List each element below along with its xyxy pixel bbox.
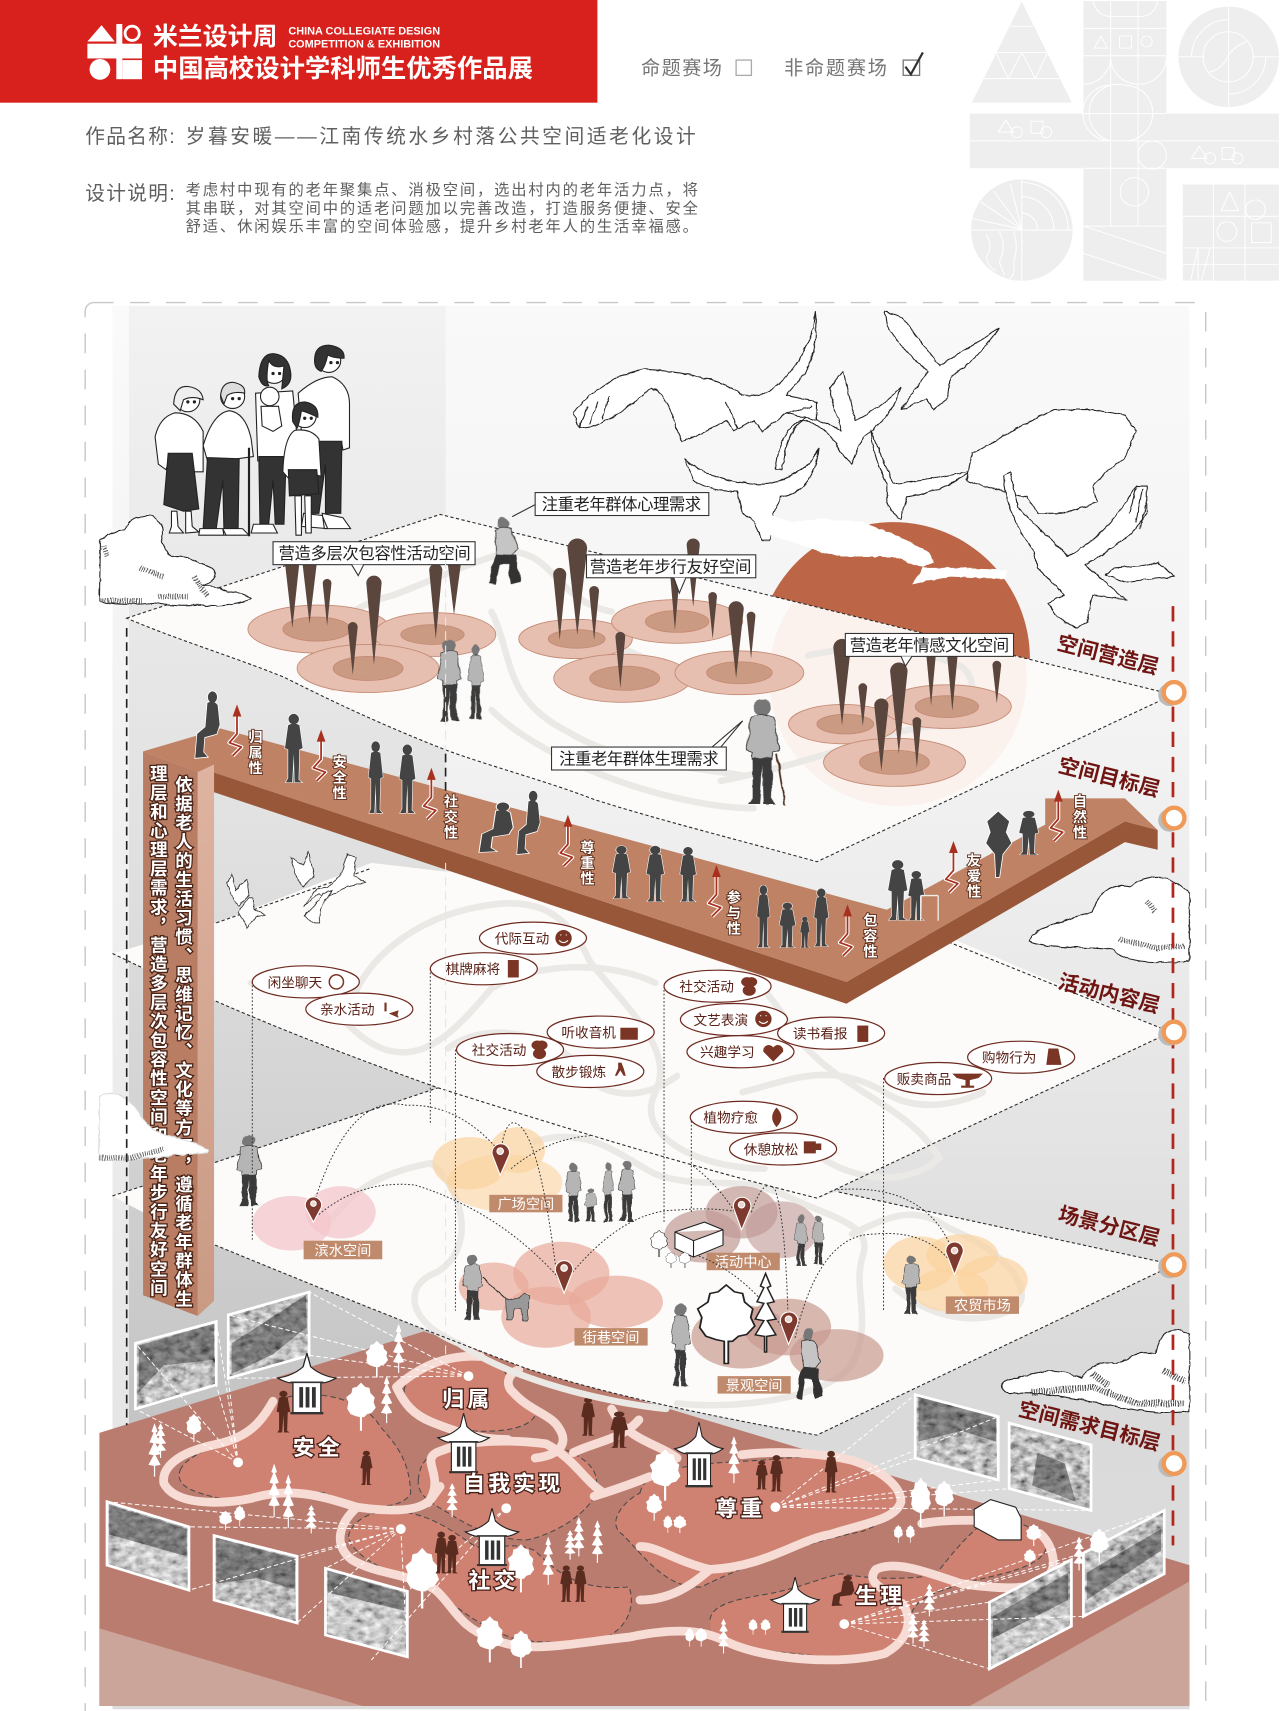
bubble: selling [885,1062,992,1095]
site: plaza: 广场空间 [497,1197,554,1213]
bubble: mahjong [430,953,537,985]
bubble: social 1: 社交活动 [472,1042,526,1058]
activity plane [112,863,1171,1198]
layer titles: 场景分区层 [1056,1203,1162,1250]
banner english: CHINA COLLEGIATE DESIGN [288,25,440,37]
cloud lower left [99,1093,208,1161]
column text right: 依据老人的生活习惯、思维记忆、文化等方面，遵循老年群体生 [173,775,193,1309]
bird 6 [1004,472,1147,628]
scene plane roads [328,1137,1022,1409]
bubble: waterside: 亲水活动 [320,1003,375,1018]
ground zone labels: 归属 [442,1387,493,1412]
baby [260,387,282,431]
header banner [0,0,597,103]
ground paths [164,1356,1053,1660]
competition type: 命题赛场 [641,57,722,79]
bubble: reading: 读书看报 [793,1027,848,1042]
ground base [99,1331,1189,1706]
logo [87,24,142,80]
arrow attribute labels: 参与性 [725,890,741,937]
layer titles: 空间需求目标层 [1016,1397,1163,1455]
banner title: 米兰设计周 [153,23,277,51]
cloud left [99,516,251,606]
vertical dashed lines [127,546,446,1425]
dotted connection arcs [315,1104,955,1338]
activity disc clusters [248,600,1011,786]
layer: space creation [127,493,1173,862]
site: market [884,1234,1028,1315]
bubble: performance [680,1003,787,1036]
bird 1 [573,311,817,442]
site: activity center [664,1186,818,1271]
bubble: walking [537,1055,644,1087]
work title: 岁暮安暖——江南传统水乡村落公共空间适老化设计 [186,126,696,148]
bird 3 [775,371,901,470]
arrow attribute labels: 友爱性 [965,852,981,900]
bubble: social 1 [457,1034,564,1066]
arrow side [213,772,1158,1004]
bird 5 [870,430,971,519]
arrow attribute labels: 自然性 [1071,793,1087,841]
silhouettes on arrow [195,691,1038,948]
arrow attribute labels: 包容性 [861,913,877,960]
arrow attribute labels: 安全性 [331,754,347,801]
callout: inclusive space [273,542,475,576]
arrow attribute labels: 归属性 [246,729,263,776]
target arrow band [143,691,1158,1316]
bubble: social 2 [664,970,771,1002]
right timeline [1016,606,1184,1545]
trees on ground [148,1324,1109,1668]
people on creation plane [438,517,785,806]
design description [186,182,698,236]
dashed frame [85,303,1206,1711]
site: plaza [432,1127,562,1213]
pagodas and buildings [278,1353,1021,1633]
creation plane [127,514,1173,862]
layer titles [1016,631,1163,1455]
callout: emotional culture [845,633,1014,666]
bubble: radio [547,1016,654,1048]
spikes [285,538,1001,771]
design description label: 设计说明: [85,183,175,205]
work title label: 作品名称: [85,126,175,148]
ground zone labels: 安全 [293,1435,343,1460]
family illustration [155,345,351,536]
dotted drop lines [252,969,884,1311]
ground front wall [99,1581,1189,1706]
ground zone labels: 尊重 [715,1496,766,1521]
bird 4 [685,448,819,541]
bubble: walking: 散步锻炼 [552,1065,606,1080]
column text left: 理层和心理层需求，营造多层次包容性空间和老年步行友好空间 [148,765,168,1298]
ground layer: demand map [99,1292,1189,1706]
location pins [305,1144,963,1344]
grandpa [199,382,253,536]
mom [251,354,297,533]
site: activity center: 活动中心 [715,1255,772,1271]
cloud over sun [767,513,1008,584]
banner english [288,25,440,51]
cloud mid right [1029,877,1189,962]
scene trees [650,1230,776,1364]
design description: 考虑村中现有的老年聚集点、消极空间，选出村内的老年活力点，将 [186,182,698,199]
decorative geometric logo pattern [970,1,1279,281]
cloud upper right [967,410,1136,513]
bubble: chatting [252,966,359,998]
bird 2 [885,311,999,410]
site: landscape [691,1299,884,1394]
ground zone labels [293,1387,905,1608]
scene plane [112,1088,1174,1435]
connection lines [107,1292,1164,1669]
people on ground [277,1391,854,1606]
bird 1 feathers [579,395,813,428]
bubble: chatting: 闲坐聊天 [268,975,323,990]
callout: inclusive space: 营造多层次包容性活动空间 [278,545,471,563]
background panel [112,306,1189,1709]
callout: physiological [552,721,743,770]
sun reflection [770,602,1026,806]
callout: physiological: 注重老年群体生理需求 [559,751,719,769]
ground zone labels: 社交 [469,1568,519,1593]
creation plane roads [317,552,972,808]
site: waterfront [252,1186,382,1259]
callout: psychological [512,493,709,517]
bubble: selling: 贩卖商品 [897,1072,951,1087]
bubble: intergenerational: 代际互动 [495,932,549,947]
bubble: social 2: 社交活动 [679,979,734,995]
creation plane outline [127,514,1173,862]
layer: activity content [112,863,1171,1198]
arrow top [143,728,1158,982]
activity plane outline [112,868,1171,1198]
bubble: waterside [306,993,413,1025]
rising arrows [229,704,1063,956]
activity plane roads [251,903,983,1177]
hub dots [233,1371,849,1629]
design description: 舒适、休闲娱乐丰富的空间体验感，提升乡村老年人的生活幸福感。 [186,218,698,236]
arrow attribute labels: 尊重性 [578,839,595,886]
bubble: learning: 兴趣学习 [700,1045,755,1060]
zone blobs [179,1360,1046,1658]
bubble: reading [778,1017,885,1049]
layer titles: 空间目标层 [1056,753,1162,802]
callout: pedestrian friendly: 营造老年步行友好空间 [590,558,751,576]
grandma [155,386,203,533]
layer nodes [1158,682,1184,1477]
layer titles: 活动内容层 [1056,969,1162,1018]
site: waterfront: 滨水空间 [315,1243,371,1259]
sun [757,522,1030,795]
bubble: radio: 听收音机 [561,1025,616,1041]
ground zone labels: 自我实现 [463,1471,564,1496]
bubble: intergenerational [479,922,586,954]
design description: 其串联，对其空间中的适老问题加以完善改造，打造服务便捷、安全 [186,200,698,218]
girl [283,402,321,535]
lower clouds [99,1093,1189,1413]
layer titles: 空间营造层 [1055,631,1161,679]
birds and upper clouds [99,311,1189,962]
banner english: COMPETITION & EXHIBITION [288,39,440,51]
bubble: shopping [968,1041,1075,1073]
support column side [198,765,214,1316]
bubble: learning [687,1036,794,1068]
bubble: relaxing [730,1133,837,1165]
upper activity bubble group [252,922,1075,1311]
support column front [143,751,198,1316]
layer: scene zoning [112,1088,1174,1435]
competition type: 非命题赛场 [784,57,887,79]
small cloud right [1105,562,1174,582]
arrow attribute labels [246,729,1087,960]
dad [298,345,351,529]
site: alley [459,1242,663,1348]
bubble: shopping: 购物行为 [982,1051,1036,1066]
site: alley: 街巷空间 [583,1330,639,1346]
callout: emotional culture: 营造老年情感文化空间 [850,637,1009,655]
scene plane outline [112,1088,1174,1435]
callout: psychological: 注重老年群体心理需求 [542,496,701,514]
bubble: relaxing: 休憩放松 [744,1141,799,1157]
bubble: performance: 文艺表演 [694,1013,748,1028]
site: landscape: 景观空间 [726,1378,783,1394]
cloud lower right [1001,1330,1189,1413]
ground zone labels: 生理 [855,1583,905,1608]
site photographs [107,1292,1164,1669]
bubble: mahjong: 棋牌麻将 [446,961,500,977]
site: market: 农贸市场 [954,1298,1011,1315]
bird 6 feathers [1129,488,1147,529]
bubble: plant therapy [690,1101,797,1133]
bubble: plant therapy: 植物疗愈 [703,1111,758,1126]
small flock of birds [227,852,366,928]
banner subtitle: 中国高校设计学科师生优秀作品展 [153,55,533,83]
scene people [237,1135,921,1399]
callout: pedestrian friendly [586,555,756,593]
competition type [641,52,923,79]
arrow attribute labels: 社交性 [442,793,458,841]
